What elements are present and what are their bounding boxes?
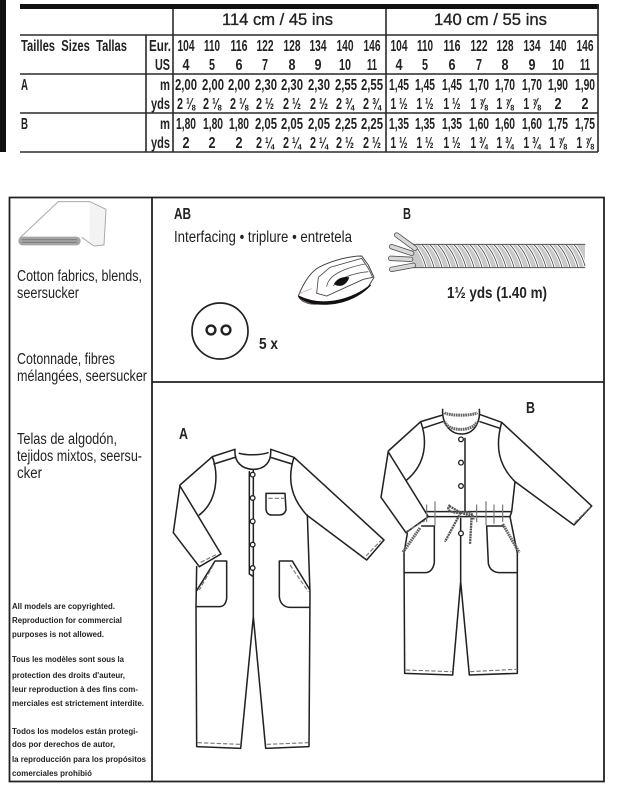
row: view A metres: 1,90 bbox=[548, 77, 568, 94]
row: view B yards: 2 ¼ bbox=[256, 135, 275, 152]
row: European sizes: 128 bbox=[496, 38, 514, 55]
row: view A metres: 2,00 bbox=[202, 77, 224, 94]
row: view A metres: 1,70 bbox=[469, 77, 489, 94]
row: view A metres: 2,30 bbox=[281, 77, 303, 94]
text: copyright French: merciales est strictement interdite. bbox=[12, 698, 144, 708]
row: view A metres: 1,70 bbox=[495, 77, 515, 94]
row: US sizes: 9 bbox=[314, 57, 322, 74]
text: copyright English bbox=[12, 601, 122, 639]
row: view A metres: 2,30 bbox=[308, 77, 330, 94]
row: US sizes: 9 bbox=[528, 57, 536, 74]
row: view A yards: 1 ⅞ bbox=[496, 96, 515, 113]
text: copyright Spanish bbox=[12, 726, 146, 778]
row: US sizes: 5 bbox=[209, 57, 215, 74]
row: view A yards: 2 ½ bbox=[256, 96, 274, 113]
row: view A metres: 2,00 bbox=[175, 77, 197, 94]
row: European sizes: 122 bbox=[256, 38, 274, 55]
text: Spanish fabrics: cker bbox=[17, 465, 42, 482]
row: US sizes: 8 bbox=[502, 57, 509, 74]
row: US sizes: 6 bbox=[236, 57, 243, 74]
icon: iron bbox=[298, 256, 374, 304]
row: view A yards: 1 ½ bbox=[444, 96, 460, 113]
row: US sizes: 4 bbox=[182, 57, 190, 74]
row: US sizes: 10 bbox=[339, 57, 351, 74]
text: copyright English: purposes is not allowed. bbox=[12, 629, 104, 639]
row: view A yards: 2 ⅛ bbox=[203, 96, 222, 113]
drawing: jumpsuit B bbox=[381, 409, 592, 675]
row: US sizes bbox=[182, 57, 590, 74]
row: view B metres: 1,60 bbox=[522, 116, 542, 133]
label B notions: B bbox=[403, 206, 411, 223]
text: copyright French: protection des droits d'auteur, bbox=[12, 670, 125, 680]
text: English fabrics bbox=[17, 268, 142, 302]
heading: 114 cm width: 114 cm / 45 ins bbox=[222, 10, 333, 29]
row labels: Eur. bbox=[149, 38, 171, 55]
row: view B yards: 2 ½ bbox=[336, 135, 354, 152]
row: European sizes: 110 bbox=[417, 38, 433, 55]
row: view B yards bbox=[182, 135, 595, 152]
text: button quantity: 5 x bbox=[259, 336, 278, 353]
row: European sizes: 140 bbox=[550, 38, 567, 55]
row: view A yards: 1 ⅞ bbox=[470, 96, 489, 113]
text: Spanish fabrics bbox=[17, 431, 142, 482]
row: European sizes: 104 bbox=[178, 38, 195, 55]
row: view A yards: 2 ⅛ bbox=[177, 96, 196, 113]
row: view A metres: 1,70 bbox=[522, 77, 542, 94]
row: view B yards: 1 ⅞ bbox=[550, 135, 568, 152]
panel: garment views bbox=[173, 400, 592, 748]
text: cord length: 1½ yds (1.40 m) bbox=[447, 285, 547, 302]
row: view B yards: 2 bbox=[182, 135, 190, 152]
heading: 140 cm width: 140 cm / 55 ins bbox=[434, 10, 547, 29]
label B view: B bbox=[526, 400, 535, 417]
row: US sizes: 7 bbox=[476, 57, 482, 74]
row: European sizes: 134 bbox=[524, 38, 541, 55]
row: view A yards: 2 ¾ bbox=[336, 96, 355, 113]
row: European sizes: 122 bbox=[470, 38, 488, 55]
row labels bbox=[21, 38, 171, 152]
row labels: m bbox=[160, 116, 170, 133]
row: view A metres: 2,30 bbox=[255, 77, 277, 94]
row: European sizes: 134 bbox=[310, 38, 327, 55]
row: view B metres: 2,25 bbox=[335, 116, 357, 133]
row: US sizes: 5 bbox=[422, 57, 428, 74]
text: copyright Spanish: dos por derechos de autor, bbox=[12, 739, 115, 749]
row: view A yards: 1 ½ bbox=[390, 96, 408, 113]
row: European sizes: 128 bbox=[284, 38, 301, 55]
row: view A metres: 1,45 bbox=[442, 77, 462, 94]
row labels: m bbox=[160, 77, 170, 94]
row: view A yards: 2 bbox=[582, 96, 589, 113]
panel frame: materials and views bbox=[10, 198, 604, 782]
row: view A metres: 2,55 bbox=[335, 77, 357, 94]
row: view A yards: 2 bbox=[554, 96, 562, 113]
row: view B metres: 1,60 bbox=[469, 116, 489, 133]
text: copyright French: leur reproduction à des fins com- bbox=[12, 684, 138, 694]
row: European sizes: 146 bbox=[364, 38, 381, 55]
row: view B yards: 2 ¼ bbox=[310, 135, 329, 152]
text: Spanish fabrics: Telas de algodón, bbox=[17, 431, 117, 448]
row: view B yards: 2 ¼ bbox=[283, 135, 302, 152]
row: view A yards: 2 ¾ bbox=[363, 96, 382, 113]
row: US sizes: 8 bbox=[288, 57, 296, 74]
row: European sizes: 116 bbox=[230, 38, 248, 55]
row: view B yards: 1 ¾ bbox=[524, 135, 542, 152]
text: French fabrics: Cotonnade, fibres bbox=[17, 351, 115, 368]
text: copyright Spanish: la reproducción para los propósitos bbox=[12, 754, 146, 764]
row: view B yards: 1 ½ bbox=[390, 135, 408, 152]
row labels: B bbox=[21, 116, 28, 133]
row: view A yards bbox=[177, 96, 589, 113]
row: US sizes: 11 bbox=[367, 57, 377, 74]
row: view B yards: 1 ⅞ bbox=[576, 135, 595, 152]
row: European sizes bbox=[178, 38, 594, 55]
row: view A yards: 2 ⅛ bbox=[230, 96, 249, 113]
icon: cord bbox=[391, 235, 585, 269]
text: French fabrics: mélangées, seersucker bbox=[17, 368, 147, 385]
left black edge bar bbox=[0, 0, 6, 152]
row: view B metres: 2,05 bbox=[255, 116, 277, 133]
label A: A bbox=[179, 426, 188, 443]
text: copyright English: All models are copyrighted. bbox=[12, 601, 115, 611]
row: European sizes: 110 bbox=[204, 38, 220, 55]
row labels: Tailles Sizes Tallas bbox=[21, 38, 127, 55]
panel: fabric suggestions bbox=[12, 202, 147, 778]
row: US sizes: 7 bbox=[262, 57, 268, 74]
row: view A yards: 1 ½ bbox=[416, 96, 434, 113]
row: US sizes: 4 bbox=[396, 57, 403, 74]
text: French fabrics bbox=[17, 351, 147, 385]
row: view B yards: 2 ½ bbox=[363, 135, 381, 152]
row labels: A bbox=[21, 77, 28, 94]
row: view B metres: 1,75 bbox=[575, 116, 595, 133]
text: copyright French bbox=[12, 654, 144, 708]
row: view A metres: 1,90 bbox=[575, 77, 595, 94]
table top bar bbox=[20, 4, 599, 9]
icon: folded fabric bbox=[18, 202, 106, 246]
row: view A yards: 2 ½ bbox=[310, 96, 328, 113]
row: view B metres: 1,35 bbox=[442, 116, 462, 133]
row: European sizes: 146 bbox=[576, 38, 594, 55]
row: view A metres bbox=[175, 77, 595, 94]
row labels: yds bbox=[151, 135, 170, 152]
row: view B metres: 1,60 bbox=[495, 116, 515, 133]
table grid lines bbox=[20, 4, 598, 152]
row: view B yards: 1 ½ bbox=[416, 135, 434, 152]
drawing: jumpsuit A bbox=[173, 449, 384, 748]
row: European sizes: 116 bbox=[444, 38, 461, 55]
row: view B yards: 2 bbox=[208, 135, 216, 152]
row: view B yards: 1 ¾ bbox=[496, 135, 515, 152]
row: view A metres: 1,45 bbox=[389, 77, 409, 94]
panel: yardage table bbox=[20, 4, 599, 152]
row: view A yards: 1 ⅞ bbox=[524, 96, 542, 113]
row: view B yards: 1 ¾ bbox=[470, 135, 489, 152]
row labels: yds bbox=[151, 96, 170, 113]
text: copyright Spanish: comerciales prohibió bbox=[12, 768, 92, 778]
row: view A metres: 1,45 bbox=[415, 77, 435, 94]
row: view B metres: 2,05 bbox=[308, 116, 330, 133]
text: English fabrics: Cotton fabrics, blends, bbox=[17, 268, 142, 285]
icon: button bbox=[192, 303, 248, 359]
row: European sizes: 104 bbox=[390, 38, 408, 55]
text: interfacing: Interfacing • triplure • entretela bbox=[174, 229, 352, 246]
row: view B metres: 1,80 bbox=[229, 116, 249, 133]
row labels: US bbox=[155, 57, 170, 74]
row: US sizes: 6 bbox=[448, 57, 456, 74]
row: view A metres: 2,55 bbox=[361, 77, 383, 94]
row: view B metres: 1,35 bbox=[389, 116, 409, 133]
row: view B metres: 1,80 bbox=[176, 116, 196, 133]
row: view B metres: 1,35 bbox=[415, 116, 435, 133]
row: view B metres: 2,25 bbox=[361, 116, 383, 133]
text: copyright French: Tous les modèles sont sous la bbox=[12, 654, 124, 664]
text: copyright English: Reproduction for commercial bbox=[12, 615, 122, 625]
row: view B metres: 2,05 bbox=[281, 116, 303, 133]
row: view A yards: 2 ½ bbox=[283, 96, 301, 113]
label AB: AB bbox=[174, 206, 191, 223]
text: Spanish fabrics: tejidos mixtos, seersu- bbox=[17, 448, 142, 465]
row: view B yards: 1 ½ bbox=[444, 135, 460, 152]
row: view B metres: 1,80 bbox=[203, 116, 223, 133]
row: view B metres bbox=[176, 116, 595, 133]
panel: notions bbox=[174, 206, 585, 359]
row: view B yards: 2 bbox=[236, 135, 243, 152]
text: copyright Spanish: Todos los modelos están protegi- bbox=[12, 726, 138, 736]
row: European sizes: 140 bbox=[336, 38, 354, 55]
row: view A metres: 2,00 bbox=[228, 77, 250, 94]
row: US sizes: 11 bbox=[580, 57, 590, 74]
row: US sizes: 10 bbox=[552, 57, 564, 74]
row: view B metres: 1,75 bbox=[548, 116, 568, 133]
text: English fabrics: seersucker bbox=[17, 285, 79, 302]
